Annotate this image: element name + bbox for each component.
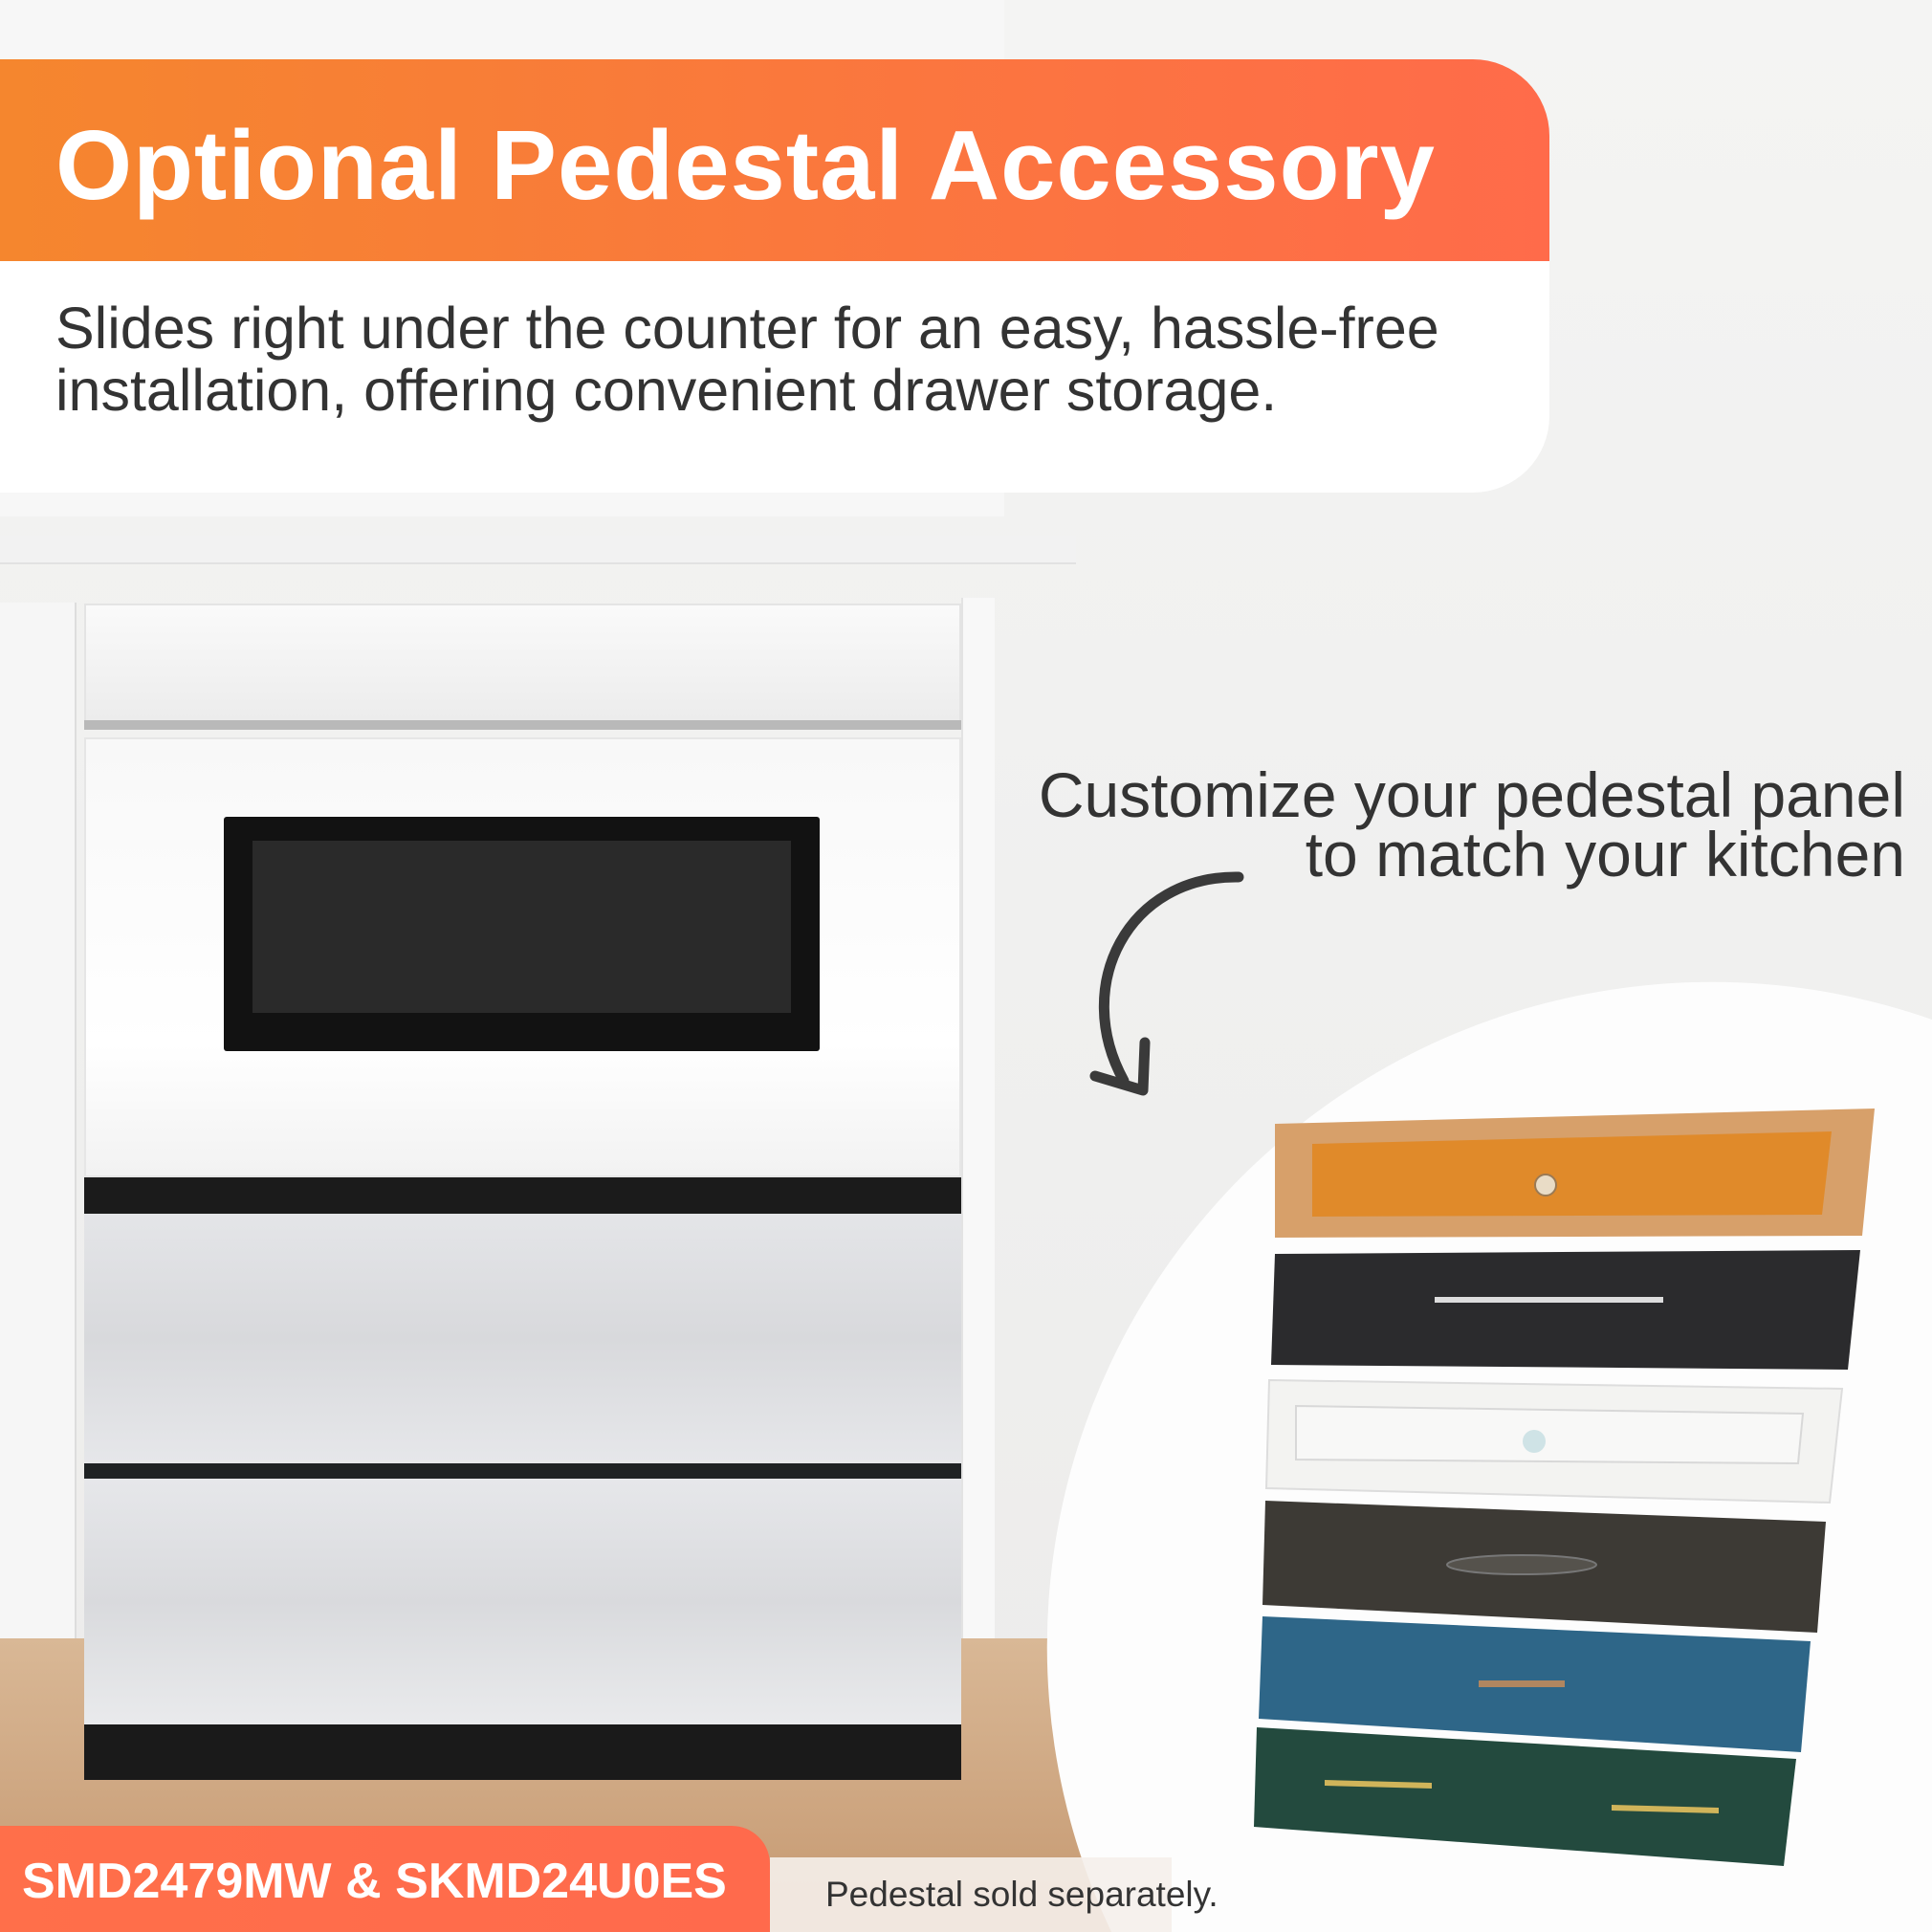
model badge: SMD2479MW & SKMD24U0ES xyxy=(22,1854,727,1909)
title banner: Optional Pedestal Accessory xyxy=(55,110,1436,220)
customize callout text: to match your kitchen xyxy=(1306,819,1905,889)
subtitle panel xyxy=(0,261,1549,493)
blue panel xyxy=(1259,1616,1811,1752)
footnote: Pedestal sold separately. xyxy=(825,1875,1218,1914)
black panel xyxy=(1271,1250,1860,1370)
title banner xyxy=(0,59,1549,261)
appliance: microwave drawer with pedestal xyxy=(84,604,961,1780)
dark gray panel xyxy=(1262,1501,1826,1633)
model badge xyxy=(0,1826,770,1932)
arrow xyxy=(1090,872,1243,1096)
subtitle panel: Slides right under the counter for an easy, hassle-free xyxy=(55,296,1439,361)
white panel xyxy=(1266,1380,1842,1503)
customize callout text: Customize your pedestal panel xyxy=(1039,759,1905,830)
footer note strip xyxy=(770,1857,1172,1932)
pedestal drawers xyxy=(84,1214,961,1463)
green panel xyxy=(1254,1727,1796,1866)
subtitle panel: installation, offering convenient drawer storage. xyxy=(55,358,1277,423)
microwave window xyxy=(224,817,820,1051)
wood panel xyxy=(1275,1109,1875,1238)
customize callout text xyxy=(1039,759,1905,889)
